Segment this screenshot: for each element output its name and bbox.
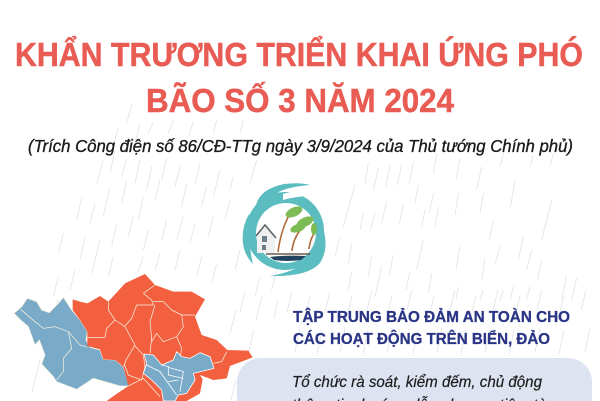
map: blue provinces west (14, 297, 129, 389)
map of northern Vietnam (14, 274, 253, 401)
subtitle: (Trích Công điện số 86/CĐ-TTg ngày 3/9/2024 của Thủ tướng Chính phủ) (28, 136, 573, 156)
heading: sea and island safety: CÁC HOẠT ĐỘNG TRÊN BIỂN, ĐẢO (293, 329, 550, 348)
icon: teal swirl (243, 183, 326, 276)
icon: storm over house (242, 183, 326, 276)
instruction text: Tổ chức rà soát, kiểm đếm, chủ động (292, 373, 542, 391)
title: BÃO SỐ 3 NĂM 2024 (146, 81, 455, 119)
icon: ground and water (266, 254, 310, 261)
map: red provinces (73, 274, 253, 401)
icon: wind-blown trees (278, 204, 317, 252)
map: blue delta provinces (143, 352, 214, 401)
heading: sea and island safety: TẬP TRUNG BẢO ĐẢM AN TOÀN CHO (293, 307, 570, 326)
title (15, 36, 583, 119)
icon: house (256, 225, 276, 253)
panel: instructions (237, 358, 592, 401)
